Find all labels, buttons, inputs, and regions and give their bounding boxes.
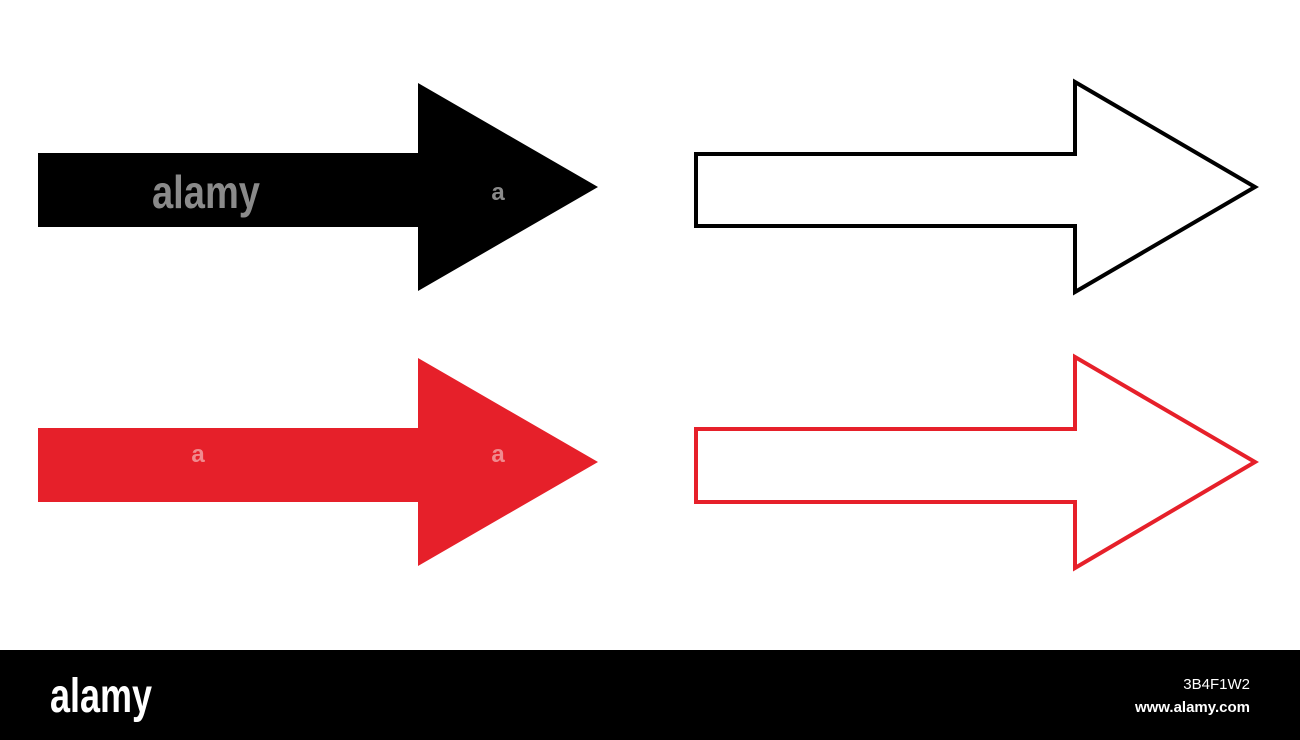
watermark: alamy on black arrow [152,166,505,218]
footer bar [0,650,1300,740]
arrow: black filled [38,83,598,291]
arrow: black outline [696,82,1255,292]
footer image id: 3B4F1W2 [1183,676,1250,693]
watermark: alamy on black arrow: a [491,179,505,206]
watermark: a marks on red arrow: a [491,441,505,468]
watermark: a marks on red arrow: a [191,441,205,468]
watermark: a marks on red arrow [191,441,505,468]
watermark: alamy on black arrow: alamy [152,166,260,218]
footer url: www.alamy.com [1134,699,1250,716]
arrow: red filled [38,358,598,566]
footer logo: alamy [50,670,152,723]
arrow: red outline [696,357,1255,568]
